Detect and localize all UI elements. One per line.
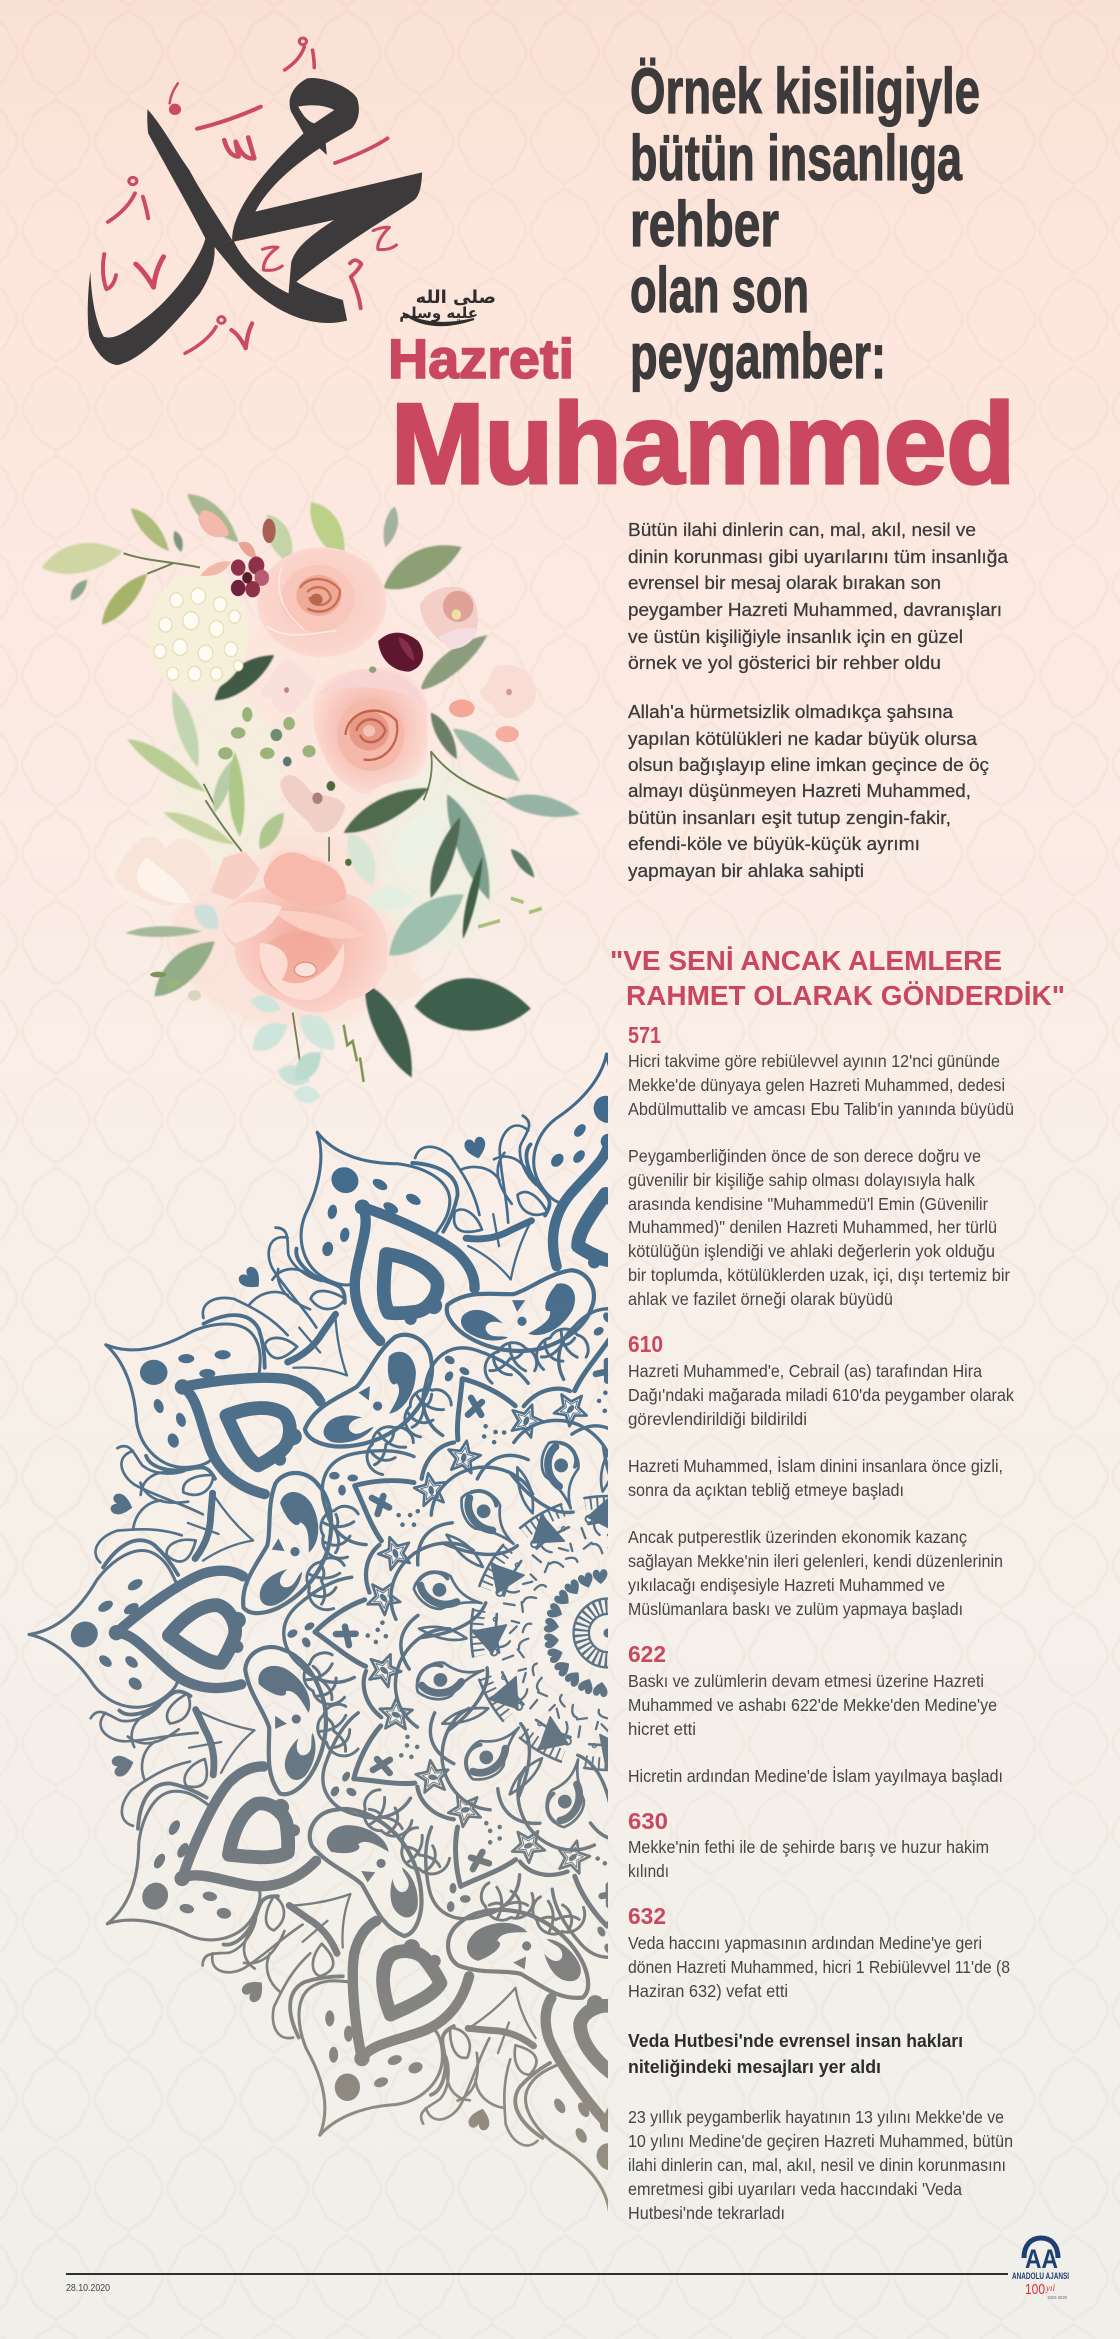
subheading: Veda Hutbesi bbox=[628, 2030, 963, 2077]
soft watercolor wash behind the flowers bbox=[165, 588, 500, 1029]
intro text: dinin korunması gibi uyarılarını tüm insanlığa bbox=[628, 546, 1009, 567]
logo: Anadolu Ajansi: AA bbox=[1025, 2244, 1058, 2274]
timeline: 610: görevlendirildiği bildirildi bbox=[628, 1409, 807, 1429]
subheading: Veda Hutbesi: niteliğindeki mesajları yer aldı bbox=[628, 2056, 881, 2077]
logo: Anadolu Ajansi: yıl bbox=[1045, 2283, 1055, 2293]
timeline: 571: Abdülmuttalib ve amcası Ebu Talib'in yanında büyüdü bbox=[628, 1099, 1014, 1119]
timeline: 610 bbox=[628, 1331, 1014, 1619]
logo: Anadolu Ajansi: 1920-2020 bbox=[1047, 2295, 1067, 2300]
leaves bbox=[39, 485, 582, 1104]
timeline: 610: 610 bbox=[628, 1331, 663, 1357]
quote heading bbox=[610, 945, 1065, 1011]
timeline: 622: Hicretin ardından Medine'de İslam yayılmaya başladı bbox=[628, 1766, 1003, 1786]
intro text: bütün insanları eşit tutup zengin-fakir, bbox=[628, 807, 951, 828]
salawat calligraphy: صلى الله bbox=[416, 287, 496, 308]
timeline: 610: sonra da açıktan tebliğ etmeye başladı bbox=[628, 1480, 904, 1500]
intro text: Allah'a hürmetsizlik olmadıkça şahsına bbox=[628, 701, 954, 722]
timeline: 571: güvenilir bir kişiliğe sahip olması dolayısıyla halk bbox=[628, 1170, 975, 1190]
timeline: 610: sağlayan Mekke'nin ileri gelenleri, kendi düzenlerinin bbox=[628, 1551, 1003, 1571]
timeline: 632: Veda haccını yapmasının ardından Medine'ye geri bbox=[628, 1933, 982, 1953]
timeline: 632: Haziran 632) vefat etti bbox=[628, 1981, 788, 2001]
calligraphy: name of the Prophet bbox=[88, 38, 422, 365]
intro text bbox=[628, 519, 1009, 881]
timeline: 571: Mekke'de dünyaya gelen Hazreti Muhammed, dedesi bbox=[628, 1075, 1005, 1095]
timeline: 571: Muhammed)" denilen Hazreti Muhammed, her türlü bbox=[628, 1217, 997, 1237]
timeline: 571: 571 bbox=[628, 1022, 661, 1048]
timeline: 622: 622 bbox=[628, 1641, 666, 1667]
logo: Anadolu Ajansi: ANADOLU AJANSI bbox=[1012, 2271, 1069, 2281]
timeline: 630: 630 bbox=[628, 1808, 668, 1834]
title: dark headline: rehber bbox=[630, 188, 779, 260]
timeline: 632: 632 bbox=[628, 1903, 666, 1929]
intro text: almayı düşünmeyen Hazreti Muhammed, bbox=[628, 780, 971, 801]
title: Muhammed: Muhammed bbox=[391, 381, 1015, 508]
title: dark headline: peygamber: bbox=[630, 320, 886, 392]
logo: Anadolu Ajansi: 100 bbox=[1025, 2281, 1045, 2298]
logo: Anadolu Ajansi bbox=[1012, 2238, 1069, 2300]
rose bottom bbox=[221, 848, 388, 1012]
title: dark headline: olan son bbox=[630, 254, 809, 326]
closing text block: emretmesi gibi uyarıları veda haccındaki 'Veda bbox=[628, 2179, 962, 2199]
closing text block: 10 yılını Medine'de geçiren Hazreti Muhammed, bütün bbox=[628, 2131, 1013, 2151]
title: dark headline bbox=[630, 55, 980, 392]
intro text: örnek ve yol gösterici bir rehber oldu bbox=[628, 652, 941, 673]
title: dark headline: Örnek kisiligiyle bbox=[630, 55, 980, 127]
timeline: 571: kötülüğün işlendiği ve ahlaki değerlerin yok olduğu bbox=[628, 1241, 995, 1261]
date: 28.10.2020 bbox=[66, 2283, 110, 2294]
intro text: evrensel bir mesaj olarak bırakan son bbox=[628, 572, 941, 593]
timeline: 571: Peygamberliğinden önce de son derece doğru ve bbox=[628, 1146, 981, 1166]
timeline: 632: dönen Hazreti Muhammed, hicri 1 Rebiülevvel 11'de (8 bbox=[628, 1957, 1010, 1977]
timeline: 622: Baskı ve zulümlerin devam etmesi üzerine Hazreti bbox=[628, 1671, 984, 1691]
timeline: 571: ahlak ve fazilet örneği olarak büyüdü bbox=[628, 1289, 893, 1309]
hydrangea bbox=[147, 574, 249, 692]
timeline: 622: hicret etti bbox=[628, 1719, 696, 1739]
green buds and berries bbox=[150, 707, 542, 1082]
timeline: 610: Müslümanlara baskı ve zulüm yapmaya başladı bbox=[628, 1599, 963, 1619]
intro text: peygamber Hazreti Muhammed, davranışları bbox=[628, 599, 1002, 620]
red diacritic marks bbox=[103, 38, 396, 353]
subheading: Veda Hutbesi: Veda Hutbesi'nde evrensel insan hakları bbox=[628, 2030, 963, 2051]
burgundy flowers bbox=[231, 557, 423, 672]
closing text block: Hutbesi'nde tekrarladı bbox=[628, 2203, 785, 2223]
intro text: Bütün ilahi dinlerin can, mal, akıl, nesil ve bbox=[628, 519, 976, 540]
title: Hazreti: Hazreti bbox=[388, 327, 574, 390]
timeline: 571: bir toplumda, kötülüklerden uzak, içi, dışı tertemiz bir bbox=[628, 1265, 1010, 1285]
timeline: 610: Dağı'ndaki mağarada miladi 610'da peygamber olarak bbox=[628, 1385, 1014, 1405]
timeline: 571 bbox=[628, 1022, 1014, 1309]
timeline: 610: Hazreti Muhammed'e, Cebrail (as) tarafından Hira bbox=[628, 1361, 982, 1381]
intro text: olsun bağışlayıp eline imkan geçince de öç bbox=[628, 754, 989, 775]
intro text: ve üstün kişiliğiyle insanlık için en güzel bbox=[628, 626, 963, 647]
closing text block: ilahi dinlerin can, mal, akıl, nesil ve dinin korunmasını bbox=[628, 2155, 1006, 2175]
timeline: 630: Mekke'nin fethi ile de şehirde barış ve huzur hakim bbox=[628, 1837, 989, 1857]
quote heading: "VE SENİ ANCAK ALEMLERE bbox=[610, 945, 1002, 976]
intro text: yapılan kötülükleri ne kadar büyük olursa bbox=[628, 728, 978, 749]
mandala ornament bbox=[0, 1040, 620, 2220]
timeline: 630 bbox=[628, 1808, 989, 1881]
quote heading: RAHMET OLARAK GÖNDERDİK" bbox=[626, 980, 1065, 1011]
salawat calligraphy: عليه وسلم bbox=[399, 304, 478, 322]
small flowers bbox=[198, 510, 536, 1000]
timeline: 622 bbox=[628, 1641, 1003, 1786]
timeline: 610: Ancak putperestlik üzerinden ekonomik kazanç bbox=[628, 1527, 967, 1547]
title: dark headline: bütün insanlıga bbox=[630, 122, 962, 194]
timeline: 571: arasında kendisine "Muhammedü'l Emin (Güvenilir bbox=[628, 1194, 988, 1214]
floral bouquet illustration bbox=[39, 485, 582, 1104]
cream rose bbox=[109, 825, 211, 910]
timeline: 571: Hicri takvime göre rebiülevvel ayının 12'nci gününde bbox=[628, 1051, 1000, 1071]
rose middle bbox=[313, 668, 428, 794]
timeline: 610: Hazreti Muhammed, İslam dinini insanlara önce gizli, bbox=[628, 1456, 1003, 1476]
intro text: efendi-köle ve büyük-küçük ayrımı bbox=[628, 833, 920, 854]
timeline: 622: Muhammed ve ashabı 622'de Mekke'den Medine'ye bbox=[628, 1695, 997, 1715]
closing text block bbox=[628, 2107, 1013, 2223]
salawat calligraphy bbox=[399, 287, 496, 325]
rose top bbox=[257, 547, 387, 657]
timeline: 610: yıkılacağı endişesiyle Hazreti Muhammed ve bbox=[628, 1575, 945, 1595]
timeline: 630: kılındı bbox=[628, 1861, 669, 1881]
closing text block: 23 yıllık peygamberlik hayatının 13 yılını Mekke'de ve bbox=[628, 2107, 1004, 2127]
footer rule bbox=[66, 2273, 1008, 2275]
intro text: yapmayan bir ahlaka sahipti bbox=[628, 860, 864, 881]
timeline: 632 bbox=[628, 1903, 1010, 2001]
